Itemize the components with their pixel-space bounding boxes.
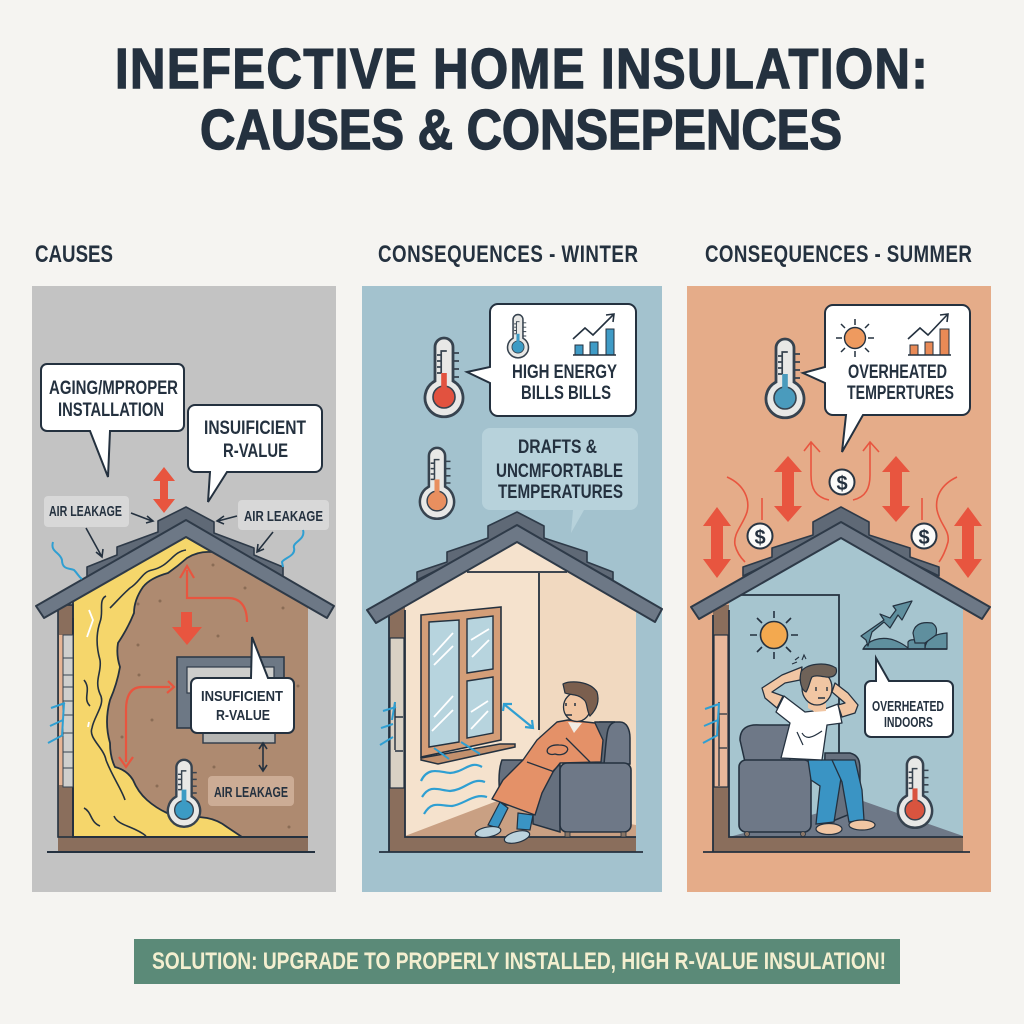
- callout: insufficient r-value at vent: [191, 637, 294, 733]
- armchair: winter: [499, 722, 631, 837]
- house cross-section: winter: [367, 512, 662, 852]
- label: air leakage left: AIR LEAKAGE: [49, 504, 122, 520]
- solution banner: [134, 939, 900, 984]
- roof shingles: [417, 512, 613, 580]
- thermometer: winter large: [425, 338, 463, 417]
- callout: overheated indoors: INDOORS: [884, 715, 933, 731]
- vent frame: [177, 657, 284, 743]
- callout: aging / improper installation: AGING/MPROPER: [49, 378, 178, 399]
- roof shingles: [87, 507, 283, 577]
- house cross-section: summer: [691, 507, 990, 852]
- icon: sun: [836, 319, 874, 357]
- roof shingles: [743, 507, 939, 576]
- title: CAUSES & CONSEPENCES: [200, 99, 842, 162]
- roof: [691, 522, 990, 619]
- armchair: summer: [739, 725, 860, 836]
- callout: high energy bills: BILLS BILLS: [521, 383, 611, 404]
- callout: drafts and uncomfortable temperatures: TEMPERATURES: [498, 482, 623, 503]
- icon: rising bills chart: [573, 314, 616, 355]
- window: [421, 607, 515, 764]
- callout: insufficient r-value: [188, 405, 322, 502]
- wall column bricks: [48, 635, 73, 787]
- dollar coin: left: [748, 524, 772, 549]
- overheated man: [762, 655, 875, 834]
- heading: consequences winter: CONSEQUENCES - WINTER: [378, 241, 638, 268]
- roof: [36, 520, 334, 618]
- thin red heat lines: [727, 442, 957, 562]
- callout: insufficient r-value at vent: R-VALUE: [216, 707, 270, 724]
- icon: small thermometer: [508, 315, 528, 358]
- panel: winter: [362, 286, 662, 892]
- thermometer: causes: [168, 760, 200, 827]
- leak pointers: [86, 513, 273, 771]
- callout: high energy bills: HIGH ENERGY: [512, 362, 617, 383]
- thermometer: winter small: [420, 448, 454, 519]
- dollar coin: right: [912, 524, 936, 549]
- dollar coin: right: $: [918, 527, 930, 549]
- title: INEFECTIVE HOME INSULATION:: [115, 38, 928, 101]
- thermometer: indoors: [898, 757, 932, 828]
- callout: overheated temperatures: OVERHEATED: [848, 362, 947, 383]
- label: air leakage lower: [208, 776, 294, 806]
- label: air leakage left: [44, 496, 129, 527]
- dollar coin: centre: [830, 470, 854, 495]
- icon: sun indoors: [750, 611, 798, 659]
- heading: causes: CAUSES: [35, 241, 113, 268]
- roof: [367, 525, 662, 623]
- red thick down arrow: [172, 612, 202, 645]
- title: [115, 38, 928, 162]
- callout: insufficient r-value: INSUIFICIENT: [204, 418, 306, 439]
- air leak squiggles: [52, 530, 303, 579]
- panel: causes: [32, 286, 336, 892]
- callout: overheated indoors: OVERHEATED: [872, 699, 944, 715]
- icon: rising temperature chart: [908, 314, 951, 355]
- red heat path lower: [119, 681, 174, 767]
- wall speckles: [120, 564, 300, 828]
- callout: drafts and uncomfortable temperatures: UNCMFORTABLE: [496, 461, 623, 482]
- callout: high energy bills: [467, 304, 636, 416]
- callout: overheated temperatures: [803, 305, 970, 452]
- icon: rising arrow over rocks: [861, 601, 947, 649]
- cold draft waves: [421, 765, 487, 814]
- heading: consequences summer: CONSEQUENCES - SUMMER: [705, 241, 972, 268]
- insulation: [73, 537, 242, 837]
- house cross-section: causes: [36, 507, 334, 852]
- callout: overheated indoors: [865, 658, 953, 737]
- dollar coin: left: $: [754, 527, 766, 549]
- thermometer: summer large: [766, 339, 804, 418]
- callout: insufficient r-value at vent: INSUFICIENT: [201, 688, 283, 705]
- label: air leakage right: [238, 500, 329, 530]
- dollar coin: centre: $: [836, 473, 848, 495]
- label: air leakage right: AIR LEAKAGE: [244, 508, 323, 525]
- blue double arrow: [503, 704, 533, 728]
- callout: drafts and uncomfortable temperatures: [482, 428, 638, 533]
- callout: drafts and uncomfortable temperatures: DRAFTS &: [518, 437, 597, 458]
- callout: aging / improper installation: INSTALLATION: [58, 400, 164, 421]
- callout: aging / improper installation: [41, 364, 184, 477]
- panel: summer: [687, 286, 991, 892]
- red heat path upper: [180, 566, 247, 622]
- callout: insufficient r-value: R-VALUE: [223, 441, 288, 462]
- red double arrow at ridge: [153, 467, 175, 513]
- label: air leakage lower: AIR LEAKAGE: [214, 785, 288, 801]
- callout: overheated temperatures: TEMPERTURES: [847, 383, 954, 404]
- person in robe: [474, 682, 603, 846]
- red heat arrows: [703, 456, 982, 578]
